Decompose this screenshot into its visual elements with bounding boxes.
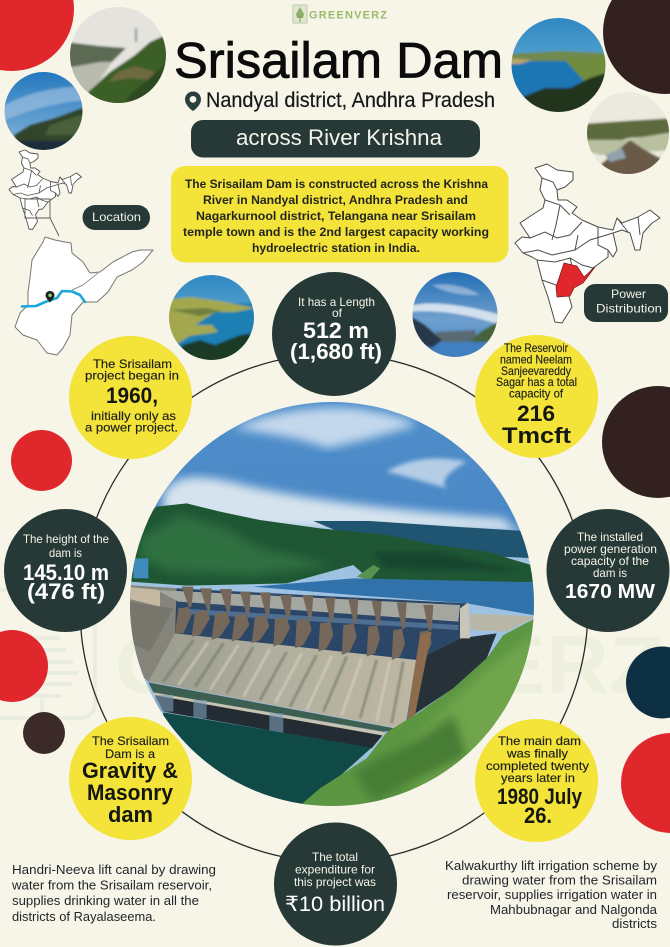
right dam flank <box>413 633 497 715</box>
photo: lake and headland <box>169 275 254 360</box>
fact: project began 1960: initially only as <box>91 409 176 423</box>
label: Power Distribution: Power <box>611 287 646 301</box>
tailwater and apron <box>148 682 403 732</box>
fact: length <box>272 272 396 396</box>
main photo: Srisailam dam <box>117 395 547 815</box>
fact: installed capacity: capacity of the <box>571 554 649 568</box>
fact: installed capacity: The installed <box>577 530 643 544</box>
watermark: GREENVERZ logo: GREENVERZ <box>115 620 663 711</box>
fact: dam height: dam is <box>49 546 82 560</box>
fact: completion date: was finally <box>506 746 568 760</box>
note: Handri-Neeva canal <box>11 862 216 924</box>
note: Kalwakurthy scheme: Kalwakurthy lift irrigation scheme by <box>445 858 658 873</box>
photo: hillside and tower <box>70 7 166 103</box>
title: Srisailam Dam <box>174 32 503 88</box>
fact: dam type: dam <box>108 802 153 827</box>
map: India location <box>9 150 82 230</box>
fact: length: (1,680 ft) <box>290 339 382 364</box>
river Krishna <box>22 291 85 306</box>
label: Power Distribution <box>584 284 668 322</box>
fact: dam type <box>69 717 192 840</box>
fact: reservoir capacity: 216 <box>517 401 555 426</box>
reservoir <box>253 578 537 616</box>
fact: completion date: The main dam <box>498 734 581 748</box>
note: Kalwakurthy scheme <box>445 858 658 931</box>
fact: reservoir capacity: Sanjeevareddy <box>501 364 571 378</box>
banner: across River Krishna <box>191 120 480 158</box>
banner: across River Krishna: across River Krishna <box>236 125 443 150</box>
subtitle with pin <box>185 89 495 112</box>
fact: installed capacity <box>546 509 670 632</box>
fact: completion date: 26. <box>524 803 552 828</box>
note: Handri-Neeva canal: water from the Srisailam reservoir, <box>11 878 212 892</box>
fact: installed capacity: dam is <box>593 566 627 580</box>
clouds <box>233 408 417 448</box>
fact: dam type: Gravity & <box>82 758 178 783</box>
fact: completion date: 1980 July <box>497 784 583 809</box>
note: Kalwakurthy scheme: Mahbubnagar and Nalgonda <box>490 902 658 917</box>
watermark: GREENVERZ logo <box>0 590 663 718</box>
fact: completion date: completed twenty <box>486 759 589 773</box>
fact: project began 1960: project began in <box>85 368 179 382</box>
fact: installed capacity: 1670 MW <box>565 581 655 603</box>
highlighted states <box>556 263 595 297</box>
fact: reservoir capacity: Sagar has a total <box>496 375 577 389</box>
fact: reservoir capacity: The Reservoir <box>504 341 568 355</box>
fact: total expenditure: The total <box>312 850 358 864</box>
photo: dam between hills <box>412 272 498 357</box>
forested hill <box>130 503 537 586</box>
icon: tree logo <box>293 5 307 23</box>
fact: total expenditure: ₹10 billion <box>285 893 385 916</box>
photo: dam from above <box>587 92 669 174</box>
intro panel: Nagarkurnool district, Telangana near Srisailam <box>196 209 476 223</box>
note: Kalwakurthy scheme: reservoir, supplies irrigation water in <box>447 887 657 902</box>
label: Location: Location <box>92 210 141 224</box>
brand name: GREENVERZ <box>309 10 387 22</box>
note: Handri-Neeva canal: supplies drinking water in all the <box>12 893 199 908</box>
left abutment <box>127 585 180 682</box>
fact: total expenditure: expenditure for <box>295 862 375 876</box>
icon: map pin <box>46 291 54 302</box>
fact: reservoir capacity: named Neelam <box>500 352 572 366</box>
fact: project began 1960: The Srisailam <box>93 357 172 371</box>
note: Handri-Neeva canal: Handri-Neeva lift canal by drawing <box>12 862 216 877</box>
logo <box>293 5 387 23</box>
connecting ring <box>80 354 588 862</box>
fact: dam height: (476 ft) <box>27 579 105 604</box>
fact: reservoir capacity: Tmcft <box>502 423 572 448</box>
fact: installed capacity: power generation <box>564 542 657 556</box>
fact: project began 1960: 1960, <box>106 383 158 408</box>
green hillside <box>297 618 540 808</box>
intro panel: The Srisailam Dam is constructed across the Krishna <box>185 177 488 191</box>
fact: completion date <box>475 719 598 842</box>
fact: total expenditure: this project was <box>294 875 376 889</box>
location inset marker <box>25 199 59 236</box>
intro panel <box>171 166 508 262</box>
map: India power distribution <box>515 164 660 323</box>
label: Location <box>82 205 150 230</box>
fact: project began 1960: a power project. <box>85 420 178 434</box>
map: Andhra Pradesh and Telangana <box>15 237 153 355</box>
photo: sky over hill <box>4 72 82 150</box>
fact: dam height: 145.10 m <box>23 560 109 585</box>
fact: dam height <box>4 509 127 632</box>
note: Kalwakurthy scheme: districts <box>612 916 658 931</box>
label: Power Distribution: Distribution <box>596 302 662 316</box>
spillway <box>148 633 417 729</box>
icon: location pin <box>185 92 201 111</box>
fact: dam height: The height of the <box>23 532 109 546</box>
fact: dam type: The Srisailam <box>92 734 169 748</box>
fact: length: It has a Length <box>298 295 375 309</box>
fact: project began 1960 <box>69 336 192 459</box>
intro panel: hydroelectric station in India. <box>252 241 420 255</box>
distant hills <box>313 521 537 558</box>
location text: Nandyal district, Andhra Pradesh <box>206 89 495 112</box>
fact: length: 512 m <box>303 318 369 343</box>
fact: dam type: Dam is a <box>105 747 155 761</box>
fact: total expenditure <box>274 822 397 946</box>
intro panel: River in Nandyal district, Andhra Pradesh and <box>203 193 468 207</box>
fact: length: of <box>332 306 343 320</box>
gate structure <box>175 588 467 660</box>
fact: reservoir capacity: capacity of <box>509 386 564 400</box>
fact: completion date: years later in <box>501 771 575 785</box>
note: Kalwakurthy scheme: drawing water from the Srisailam <box>462 872 657 888</box>
photo: reservoir view <box>512 18 606 112</box>
intro panel: temple town and is the 2nd largest capacity working <box>183 225 489 239</box>
note: Handri-Neeva canal: districts of Rayalaseema. <box>12 909 156 924</box>
fact: reservoir capacity <box>475 335 598 458</box>
fact: dam type: Masonry <box>87 780 174 805</box>
